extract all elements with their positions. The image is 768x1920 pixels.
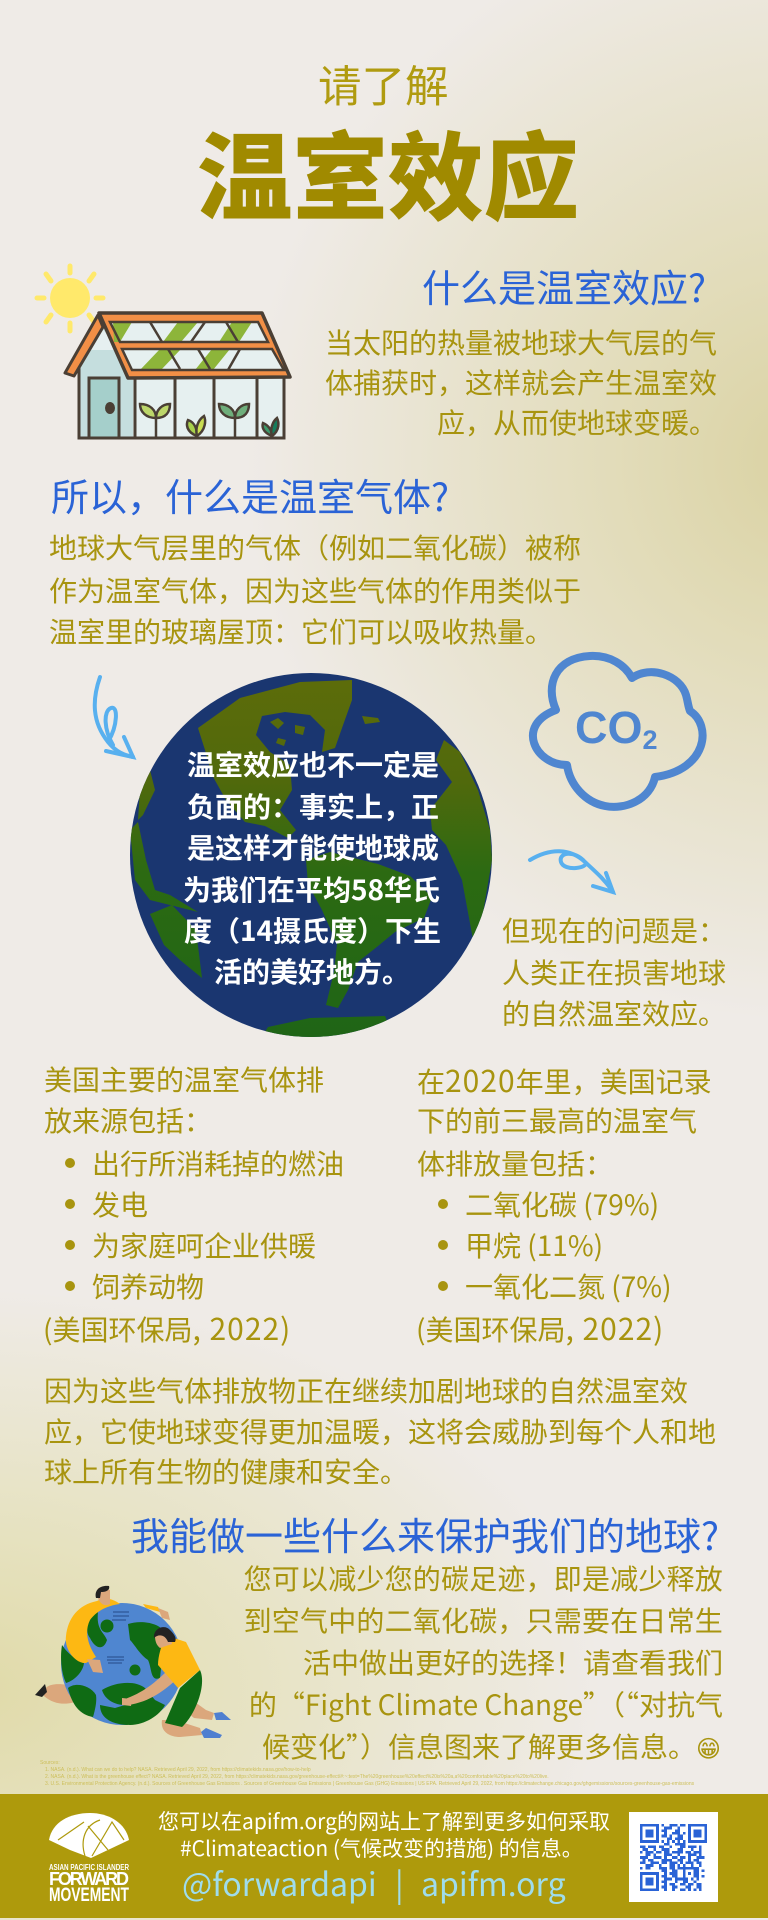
text: 美国主要的温室气体排 [44, 1059, 324, 1099]
text: (美国环保局, 2022) [43, 1305, 291, 1349]
text: 作为温室气体，因为这些气体的作用类似于 [49, 570, 581, 610]
footer text: call to action [158, 1806, 610, 1863]
text: 二氧化碳 (79%) [465, 1184, 659, 1224]
text: (美国环保局, 2022) [416, 1305, 664, 1349]
icon: CO2 cloud: CO [575, 702, 642, 753]
text: 人类正在损害地球 [502, 952, 726, 992]
illustration: people hugging the earth [35, 1586, 231, 1738]
logo: Forward Movement: FORWARD [49, 1869, 129, 1889]
footer text: social handles: apifm.org [421, 1860, 566, 1906]
panel: US emission sources list [43, 1059, 344, 1349]
heading: what can I do: 我能做一些什么来保护我们的地球? [131, 1506, 719, 1561]
text: 活的美好地方。 [214, 951, 410, 991]
logo: Forward Movement: MOVEMENT [49, 1885, 129, 1906]
heading: what is the greenhouse effect: 什么是温室效应? [422, 258, 706, 313]
text: 当太阳的热量被地球大气层的气 [325, 322, 717, 362]
panel: footer: 您可以在apifm.org的网站上了解到更多如何采取 [158, 1806, 610, 1836]
text block: greenhouse effect definition [325, 322, 717, 442]
title: subtitle: 请了解 [318, 52, 448, 115]
text block: impact of emissions [44, 1370, 716, 1491]
text: 下的前三最高的温室气 [417, 1100, 697, 1140]
text block: sources: 2. NASA. (n.d.). What is the greenhouse effect? NASA. Retrieved April 29, 2022, from https://climatekids.nasa.gov/greenhouse-effect/#:~:text=The%20greenhouse%20effect%20is%20a,a%20comfortable%20place%20to%20live. [45, 1774, 549, 1780]
text: 负面的：事实上，正 [187, 786, 439, 826]
text: 出行所消耗掉的燃油 [92, 1143, 344, 1183]
logo: Forward Movement [49, 1813, 129, 1906]
icon: curly arrow to text [528, 849, 616, 896]
text: 的“Fight Climate Change”（“对抗气 [249, 1684, 723, 1724]
QR code [629, 1812, 718, 1902]
footer text: social handles: @forwardapi [182, 1860, 377, 1906]
text: 温室里的玻璃屋顶：它们可以吸收热量。 [49, 611, 553, 651]
text: 应，它使地球变得更加温暖，这将会威胁到每个人和地 [44, 1411, 716, 1451]
text: 一氧化二氮 (7%) [465, 1266, 672, 1306]
footer text: social handles: | [395, 1860, 404, 1906]
text: 为我们在平均58华氏 [183, 869, 440, 909]
icon: CO2 cloud [528, 652, 707, 811]
text: 温室效应也不一定是 [187, 744, 439, 784]
title: main heading: 温室效应 [197, 101, 579, 240]
text block: greenhouse gases [49, 527, 581, 651]
illustration: earth globe [130, 673, 492, 1037]
text: 甲烷 (11%) [465, 1225, 603, 1265]
text: 应，从而使地球变暖。 [437, 402, 717, 442]
text: 活中做出更好的选择！请查看我们 [303, 1642, 723, 1682]
text block: what you can do [244, 1558, 723, 1766]
text block: sources [40, 1760, 694, 1787]
logo: Forward Movement: ASIAN PACIFIC ISLANDER [49, 1863, 129, 1872]
text block: sources: Sources: [40, 1760, 60, 1766]
icon: CO2 cloud: 2 [642, 725, 658, 755]
panel: footer: #Climateaction (气候改变的措施) 的信息。 [180, 1833, 583, 1863]
text: 发电 [92, 1184, 148, 1224]
heading: what are greenhouse gases: 所以，什么是温室气体? [51, 467, 449, 522]
text block: sources: 3. U.S. Environmental Protection Agency. (n.d.). Sources of Greenhouse Gas Emissions . Sources of Greenhouse Gas Emissions | Greenhouse Gas (GHG) Emissions | US EPA. Retrieved April 29, 2022, from https://climatechange.chicago.gov/ghgemissions/sources-greenhouse-gas-emissions [45, 1781, 694, 1787]
callout: earth text [183, 744, 441, 991]
text: 是这样才能使地球成 [187, 827, 439, 867]
panel: footer [0, 1794, 768, 1918]
text: 球上所有生物的健康和安全。 [44, 1451, 408, 1491]
text: 体排放量包括： [417, 1143, 613, 1183]
text: 到空气中的二氧化碳，只需要在日常生 [244, 1600, 723, 1640]
text: 地球大气层里的气体（例如二氧化碳）被称 [49, 527, 581, 567]
text: 为家庭呵企业供暖 [92, 1225, 316, 1265]
text: 的自然温室效应。 [502, 993, 726, 1033]
text: 度（14摄氏度）下生 [184, 910, 441, 950]
icon: curly arrow to earth [92, 675, 136, 760]
icon: sun [34, 264, 106, 334]
text: 在2020年里，美国记录 [417, 1057, 712, 1101]
text: 因为这些气体排放物正在继续加剧地球的自然温室效 [44, 1370, 688, 1410]
text block: the problem [502, 910, 726, 1033]
text: 您可以减少您的碳足迹，即是减少释放 [244, 1558, 723, 1598]
footer text: social handles [182, 1860, 566, 1906]
text: 体捕获时，这样就会产生温室效 [325, 362, 717, 402]
text: 饲养动物 [92, 1266, 204, 1306]
text: 候变化”）信息图来了解更多信息。😁 [262, 1726, 721, 1766]
text block: sources: 1. NASA. (n.d.). What can we do to help? NASA. Retrieved April 29, 2022, from https://climatekids.nasa.gov/how-to-help [45, 1767, 311, 1773]
text: 放来源包括： [44, 1100, 212, 1140]
icon: greenhouse [63, 311, 292, 440]
panel: top emissions in 2020 list [416, 1057, 712, 1349]
text: 但现在的问题是： [502, 910, 726, 950]
